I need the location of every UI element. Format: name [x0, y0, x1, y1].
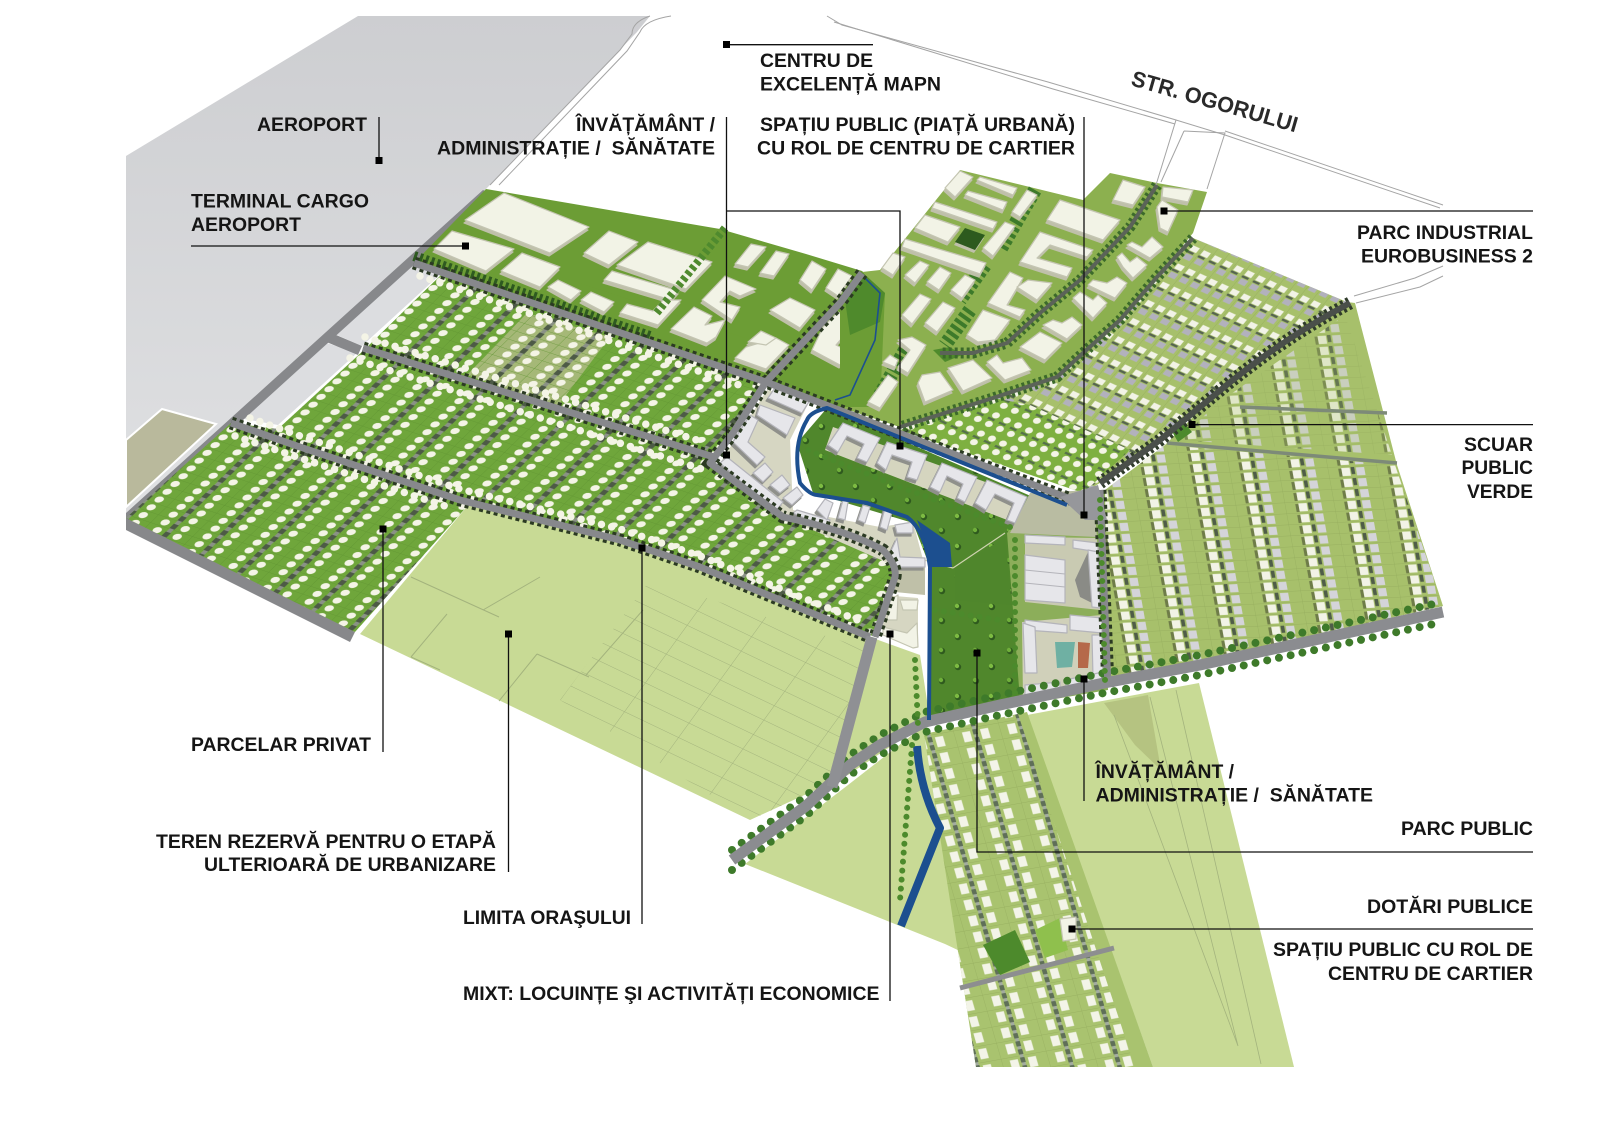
label: SPATIU PUBLIC PIATA URBANA: SPAȚIU PUBLIC (PIAȚĂ URBANĂ) — [760, 114, 1075, 136]
label: PARC PUBLIC: PARC PUBLIC — [1401, 819, 1533, 840]
label: TERMINAL CARGO AEROPORT — [191, 192, 469, 250]
north-east buildings — [868, 171, 1193, 408]
label: TERMINAL CARGO AEROPORT: AEROPORT — [191, 215, 301, 236]
label: TEREN REZERVA — [156, 630, 512, 876]
label: LIMITA ORASULUI — [463, 544, 646, 929]
panel: central north residential row — [825, 423, 1027, 523]
road network — [231, 185, 1443, 860]
panel: east educational block 2 — [1022, 615, 1103, 700]
label: STR. OGORULUI: STR. OGORULUI — [1129, 66, 1301, 137]
label: SPATIU PUBLIC PIATA URBANA — [757, 114, 1088, 518]
bright green residential band — [900, 398, 1130, 493]
panel: north-east industrial park — [835, 170, 1207, 427]
panel: south residential block — [924, 712, 1153, 1067]
label: AEROPORT — [257, 115, 382, 164]
panel: plaza near canal — [895, 567, 925, 595]
panel: plaza — [1010, 490, 1097, 537]
panel: west industrial area — [414, 189, 900, 427]
label: SPATIU PUBLIC CENTRU DE CARTIER: CENTRU DE CARTIER — [1328, 964, 1533, 985]
label: PARC INDUSTRIAL EUROBUSINESS 2: PARC INDUSTRIAL — [1357, 223, 1533, 244]
label: CENTRU DE EXCELENTA MAPN: EXCELENȚĂ MAPN — [760, 74, 941, 96]
label: MIXT: MIXT: LOCUINȚE ŞI ACTIVITĂȚI ECONOMICE — [463, 983, 880, 1005]
label: SCUAR PUBLIC VERDE — [1188, 421, 1533, 503]
panel: mixed-use building near road — [883, 595, 918, 648]
house rows along roads — [235, 276, 860, 621]
panel: airport land — [126, 16, 650, 525]
airport tan patch — [126, 409, 216, 507]
label: SPATIU PUBLIC CENTRU DE CARTIER — [1273, 940, 1533, 985]
label: INVATAMANT left — [437, 114, 730, 458]
airport light strips — [239, 254, 445, 425]
label: INVATAMANT right — [1080, 676, 1373, 806]
industrial buildings — [434, 193, 869, 369]
panel: south-east reserve land — [1027, 683, 1294, 1067]
label: CENTRU DE EXCELENTA MAPN: CENTRU DE — [760, 51, 873, 72]
tree rows on roads — [231, 185, 1443, 870]
label: INVATAMANT left: ADMINISTRAȚIE / SĂNĂTATE — [437, 138, 715, 160]
panel: east residential — [1104, 302, 1443, 683]
airport perimeter road — [126, 190, 492, 642]
label: DOTARI PUBLICE — [1068, 896, 1533, 932]
panel: west central mixed buildings — [720, 385, 925, 567]
tree lines between buildings — [880, 190, 1035, 395]
label: LIMITA ORASULUI: LIMITA ORAŞULUI — [463, 908, 631, 929]
panel: central park — [797, 408, 1033, 720]
label: DOTARI PUBLICE: DOTĂRI PUBLICE — [1367, 896, 1533, 918]
panel: north-east residential — [900, 238, 1347, 493]
panel: green belt around east blocks — [1005, 490, 1108, 705]
south neighbourhood square — [960, 917, 1114, 988]
label: PARC PUBLIC — [974, 650, 1533, 852]
label: INVATAMANT right: ADMINISTRAȚIE / SĂNĂTATE — [1096, 784, 1373, 806]
canal — [797, 408, 1067, 926]
label: INVATAMANT left: ÎNVĂȚĂMÂNT / — [575, 114, 716, 136]
icon: green square — [1170, 420, 1192, 442]
panel: west private residential parcels — [126, 274, 895, 637]
panel: reserve land for later urbanisation — [360, 503, 962, 952]
label: PARC INDUSTRIAL EUROBUSINESS 2: EUROBUSINESS 2 — [1361, 246, 1533, 268]
label: AEROPORT: AEROPORT — [257, 115, 367, 136]
access road lines near airport — [490, 16, 671, 185]
street name road outline — [827, 16, 1443, 303]
sports court — [1078, 642, 1090, 668]
label: TEREN REZERVA: TEREN REZERVĂ PENTRU O ETAPĂ — [156, 831, 496, 853]
label: CENTRU DE EXCELENTA MAPN — [723, 41, 941, 96]
label: SPATIU PUBLIC CENTRU DE CARTIER: SPAȚIU PUBLIC CU ROL DE — [1273, 940, 1533, 961]
label: PARCELAR PRIVAT — [191, 526, 386, 756]
label: MIXT — [463, 630, 894, 1005]
label: SCUAR PUBLIC VERDE: SCUAR — [1464, 435, 1533, 456]
label: INVATAMANT right: ÎNVĂȚĂMÂNT / — [1094, 761, 1235, 783]
label: SCUAR PUBLIC VERDE: PUBLIC — [1462, 458, 1533, 479]
tree rows around canal and park — [800, 447, 1105, 900]
sports field — [1055, 642, 1075, 668]
label: TERMINAL CARGO AEROPORT: TERMINAL CARGO — [191, 192, 369, 212]
label: SCUAR PUBLIC VERDE: VERDE — [1467, 482, 1533, 503]
label: TEREN REZERVA: ULTERIOARĂ DE URBANIZARE — [204, 854, 496, 876]
label: PARC INDUSTRIAL EUROBUSINESS 2 — [1160, 208, 1533, 268]
label: SPATIU PUBLIC PIATA URBANA: CU ROL DE CENTRU DE CARTIER — [757, 138, 1075, 160]
label: PARCELAR PRIVAT: PARCELAR PRIVAT — [191, 735, 371, 756]
leader: central residential row — [726, 211, 904, 450]
panel: east educational block 1 — [1025, 535, 1100, 610]
